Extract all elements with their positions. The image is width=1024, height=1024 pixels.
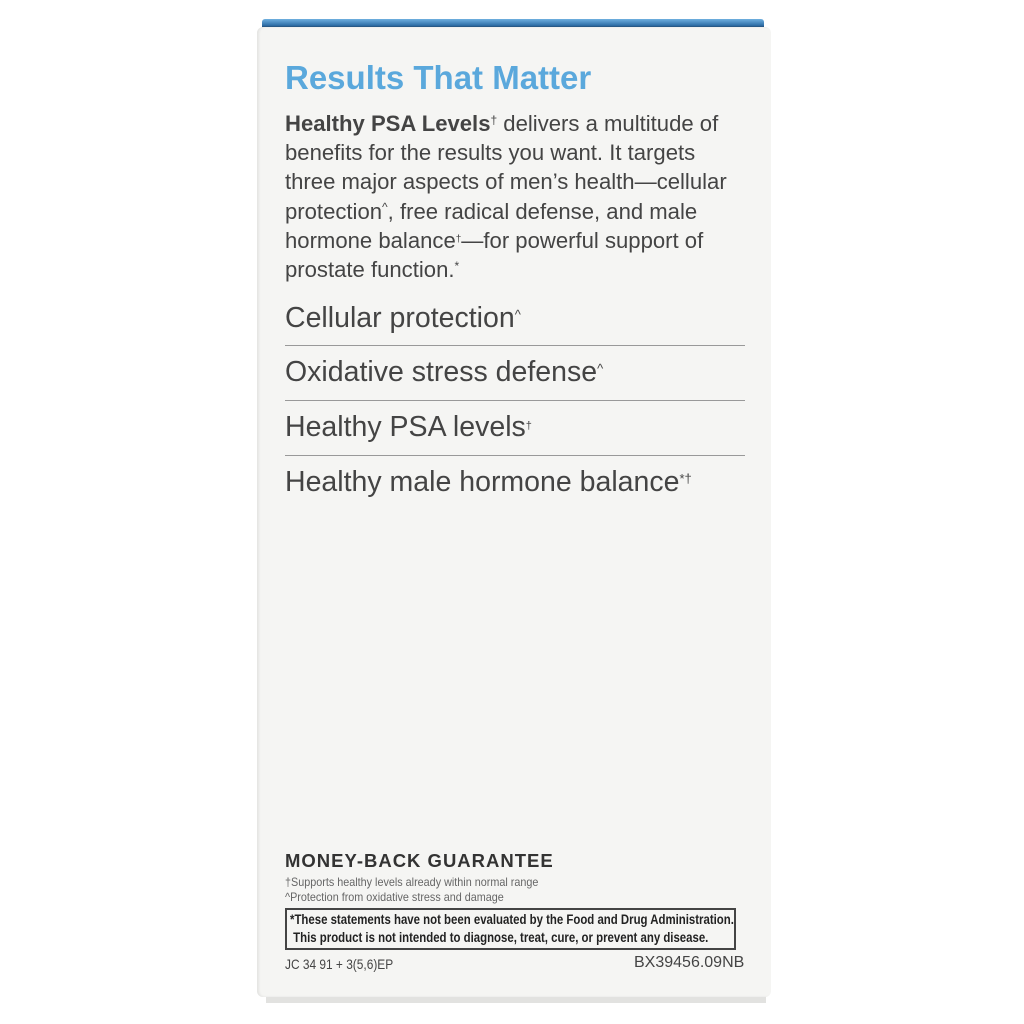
FDA disclaimer box: This product is not intended to diagnose, treat, cure, or prevent any disease.	[293, 930, 708, 945]
guarantee heading: MONEY-BACK GUARANTEE	[285, 850, 554, 871]
footnotes	[285, 875, 538, 904]
benefits list	[285, 302, 745, 498]
codes: JC 34 91 + 3(5,6)EP	[285, 956, 393, 972]
intro text	[285, 111, 727, 282]
box top blue edge	[262, 19, 764, 28]
panel: box face	[257, 27, 771, 997]
title: Results That Matter	[285, 59, 591, 96]
intro text: Healthy PSA Levels† delivers a multitude of	[285, 111, 718, 136]
intro text: prostate function.*	[285, 257, 459, 282]
intro text: benefits for the results you want. It targets	[285, 140, 695, 165]
panel: box face: BX39456.09NB	[634, 954, 744, 971]
intro text: hormone balance†—for powerful support of	[285, 228, 703, 253]
intro text: protection^, free radical defense, and male	[285, 199, 697, 224]
benefits list: Oxidative stress defense^	[285, 356, 603, 388]
footnotes: †Supports healthy levels already within normal range	[285, 875, 538, 889]
FDA disclaimer box: *These statements have not been evaluated by the Food and Drug Administration.	[290, 912, 734, 927]
intro text: three major aspects of men’s health—cellular	[285, 169, 727, 194]
benefits list: Cellular protection^	[285, 302, 521, 334]
benefits list: Healthy male hormone balance*†	[285, 466, 692, 498]
FDA disclaimer box	[285, 908, 736, 950]
bottom shadow edge	[266, 994, 766, 1003]
benefits list: Healthy PSA levels†	[285, 411, 532, 443]
footnotes: ^Protection from oxidative stress and damage	[285, 890, 504, 904]
